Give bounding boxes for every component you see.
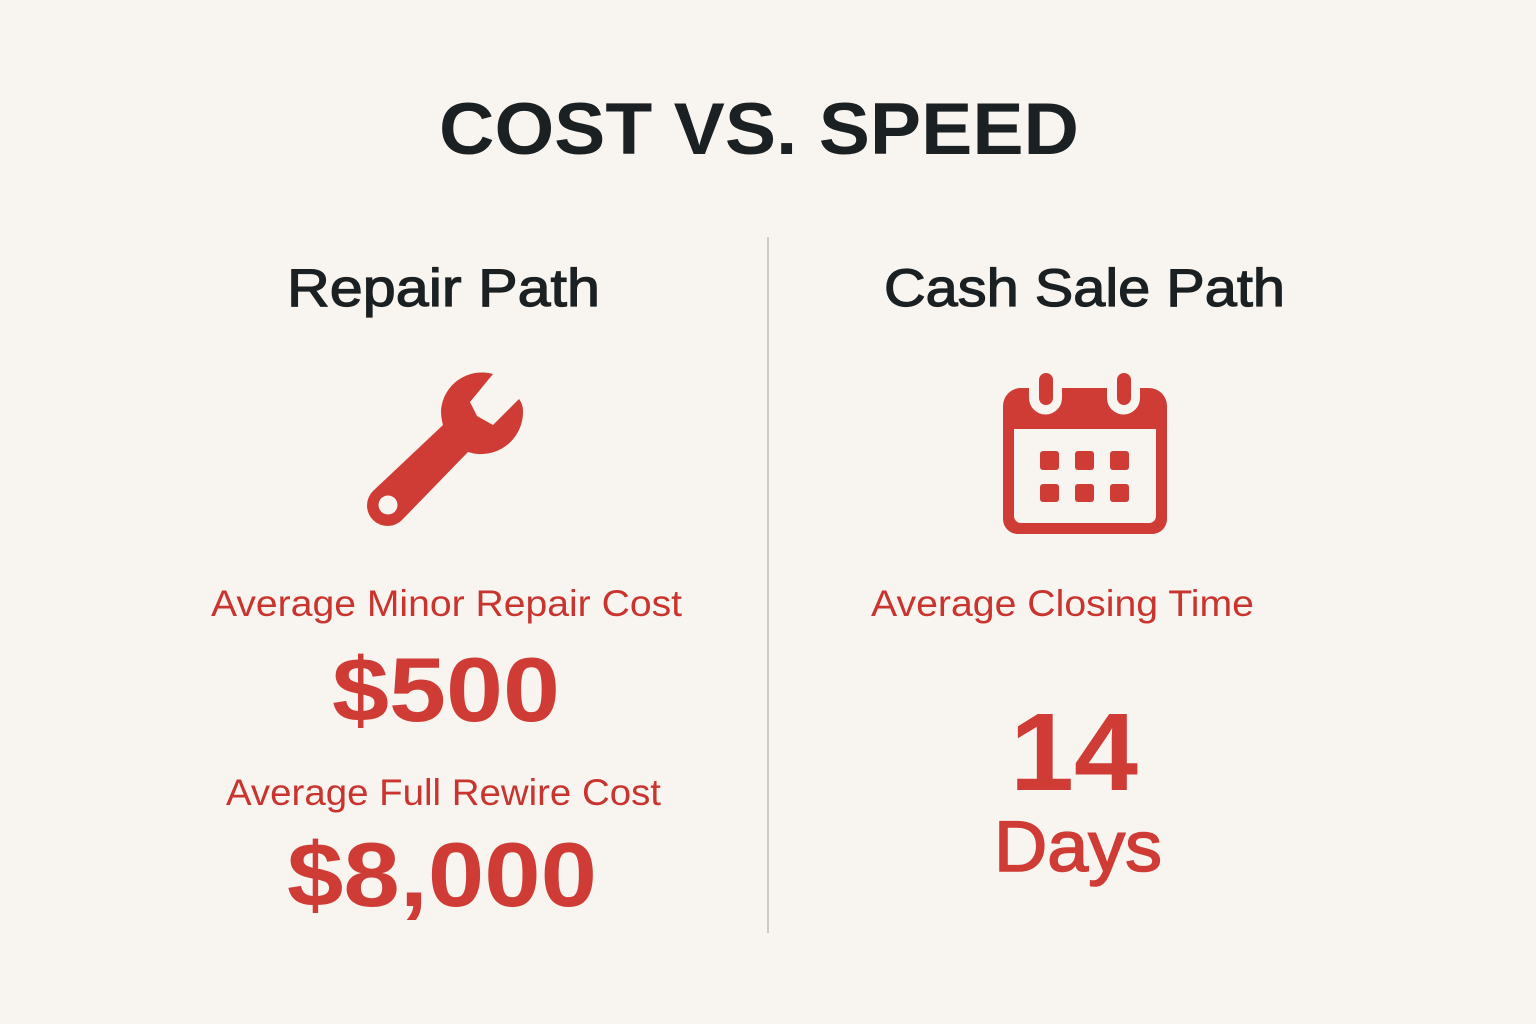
title: COST VS. SPEED xyxy=(439,89,1079,170)
icon: calendar xyxy=(1003,373,1167,534)
value: $8,000: $8,000 xyxy=(287,825,597,926)
value: 14: 14 xyxy=(1010,691,1138,814)
heading: cash sale path: Cash Sale Path xyxy=(884,259,1285,318)
panel: cash sale path xyxy=(871,259,1285,887)
label: average minor repair cost: Average Minor Repair Cost xyxy=(211,583,683,624)
heading: repair path: Repair Path xyxy=(287,259,600,318)
value: $500: $500 xyxy=(332,640,560,741)
label: average closing time: Average Closing Time xyxy=(871,583,1254,624)
value: days: Days xyxy=(994,808,1162,887)
label: average full rewire cost: Average Full Rewire Cost xyxy=(226,772,662,813)
panel: repair path xyxy=(211,259,683,926)
icon: wrench xyxy=(367,372,523,526)
